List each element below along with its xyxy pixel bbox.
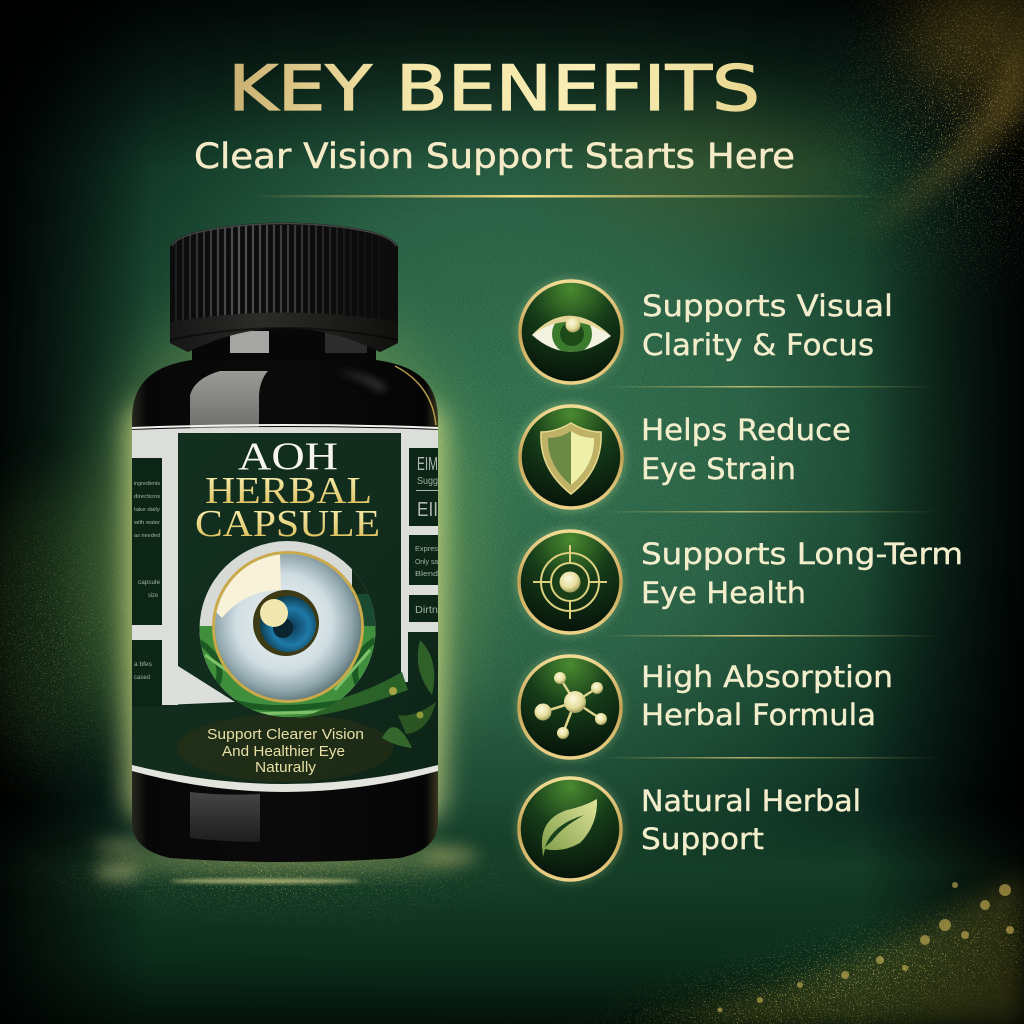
label micro text: Sugg bbox=[417, 476, 438, 487]
benefit 2 bbox=[516, 402, 851, 512]
benefit 3 bbox=[515, 527, 963, 637]
divider bbox=[600, 511, 940, 512]
label micro text: EII bbox=[417, 499, 438, 521]
label micro text: Expres bbox=[415, 546, 439, 553]
icon: leaf bbox=[515, 774, 625, 884]
icon: target bbox=[515, 527, 625, 637]
text: Natural Herbal bbox=[641, 784, 861, 818]
subtitle: Clear Vision Support Starts Here bbox=[194, 137, 795, 177]
label micro text: Dirtn bbox=[415, 605, 438, 616]
label foliage bbox=[177, 640, 436, 782]
bottle cap bbox=[168, 215, 400, 355]
text: Helps Reduce bbox=[641, 413, 851, 447]
icon: eye bbox=[516, 277, 626, 387]
benefit 1 bbox=[516, 277, 893, 387]
bottle neck bbox=[192, 322, 376, 365]
text bbox=[641, 537, 963, 610]
product name bbox=[195, 435, 380, 545]
divider bbox=[600, 386, 940, 388]
divider bbox=[600, 635, 940, 636]
label tagline bbox=[207, 727, 364, 776]
icon: shield bbox=[516, 402, 626, 512]
bottle glow bbox=[90, 290, 480, 884]
text bbox=[641, 413, 851, 486]
benefit 5 bbox=[515, 774, 861, 884]
label micro text: with water bbox=[134, 520, 160, 526]
text: Eye Health bbox=[641, 576, 806, 610]
text: Eye Strain bbox=[641, 452, 796, 486]
text: Support bbox=[641, 822, 764, 856]
bottle bbox=[132, 215, 439, 862]
text bbox=[642, 289, 893, 362]
label micro text: capsule bbox=[138, 580, 161, 586]
product name: AOH bbox=[238, 435, 338, 478]
text: Herbal Formula bbox=[641, 698, 876, 732]
title: KEY BENEFITS bbox=[228, 52, 760, 125]
product name: HERBAL bbox=[205, 470, 372, 512]
label micro text: size bbox=[148, 593, 159, 599]
label tagline: Naturally bbox=[255, 760, 317, 776]
label micro text: cased bbox=[134, 675, 150, 681]
divider bbox=[600, 757, 940, 758]
bottle body bbox=[132, 360, 438, 862]
label bbox=[132, 425, 438, 792]
label micro text bbox=[134, 454, 439, 681]
text: Supports Visual bbox=[642, 289, 893, 323]
text bbox=[641, 784, 861, 856]
benefit 4 bbox=[515, 652, 893, 762]
label micro text: ingredients bbox=[134, 481, 161, 487]
label micro text: take daily bbox=[134, 507, 161, 513]
label micro text: a bfes bbox=[134, 662, 152, 668]
label micro text: EIM bbox=[417, 454, 438, 474]
heading divider bbox=[250, 195, 890, 198]
text: Clarity & Focus bbox=[642, 328, 874, 362]
label micro text: as needed bbox=[134, 533, 160, 539]
bokeh: gold particles lower right bbox=[718, 882, 1014, 1012]
label tagline: Support Clearer Vision bbox=[207, 727, 364, 743]
icon: molecule bbox=[515, 652, 625, 762]
product name: CAPSULE bbox=[195, 503, 380, 545]
label micro text: directions bbox=[134, 494, 161, 500]
text bbox=[641, 660, 893, 732]
text: Supports Long-Term bbox=[641, 537, 963, 571]
eye graphic bbox=[200, 541, 376, 717]
label micro text: Blend bbox=[415, 571, 438, 578]
label tagline: And Healthier Eye bbox=[222, 744, 345, 760]
label micro text: Only sa bbox=[415, 559, 438, 566]
text: High Absorption bbox=[641, 660, 893, 694]
